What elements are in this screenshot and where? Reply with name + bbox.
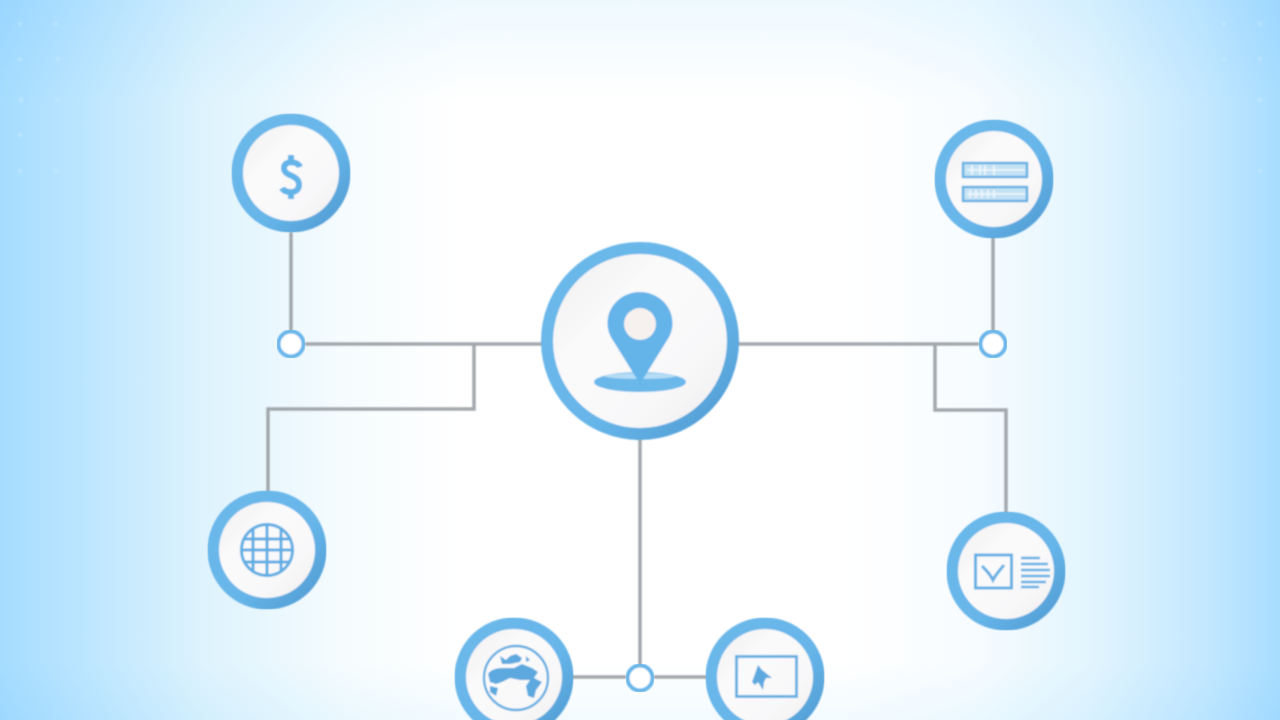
junction node: left: [278, 332, 304, 356]
node: screen: [711, 623, 819, 720]
icon: map pin: [594, 292, 686, 392]
central location hub: [547, 248, 733, 434]
node: dollar: [237, 119, 345, 227]
junction node: right: [980, 332, 1006, 356]
icon: earth: [484, 646, 548, 710]
icon: dollar sign: [282, 155, 300, 199]
connector lines: [268, 232, 1006, 677]
icon: checkbox with text lines: [976, 555, 1050, 588]
junction node: bottom: [628, 666, 652, 690]
icon: wire globe: [242, 524, 292, 576]
icon: server racks: [963, 163, 1027, 201]
node: checklist: [952, 517, 1060, 625]
icon: screen with cursor figure: [736, 656, 796, 696]
node: grid globe: [213, 496, 321, 604]
node: server: [940, 125, 1048, 233]
node: world: [460, 623, 568, 720]
